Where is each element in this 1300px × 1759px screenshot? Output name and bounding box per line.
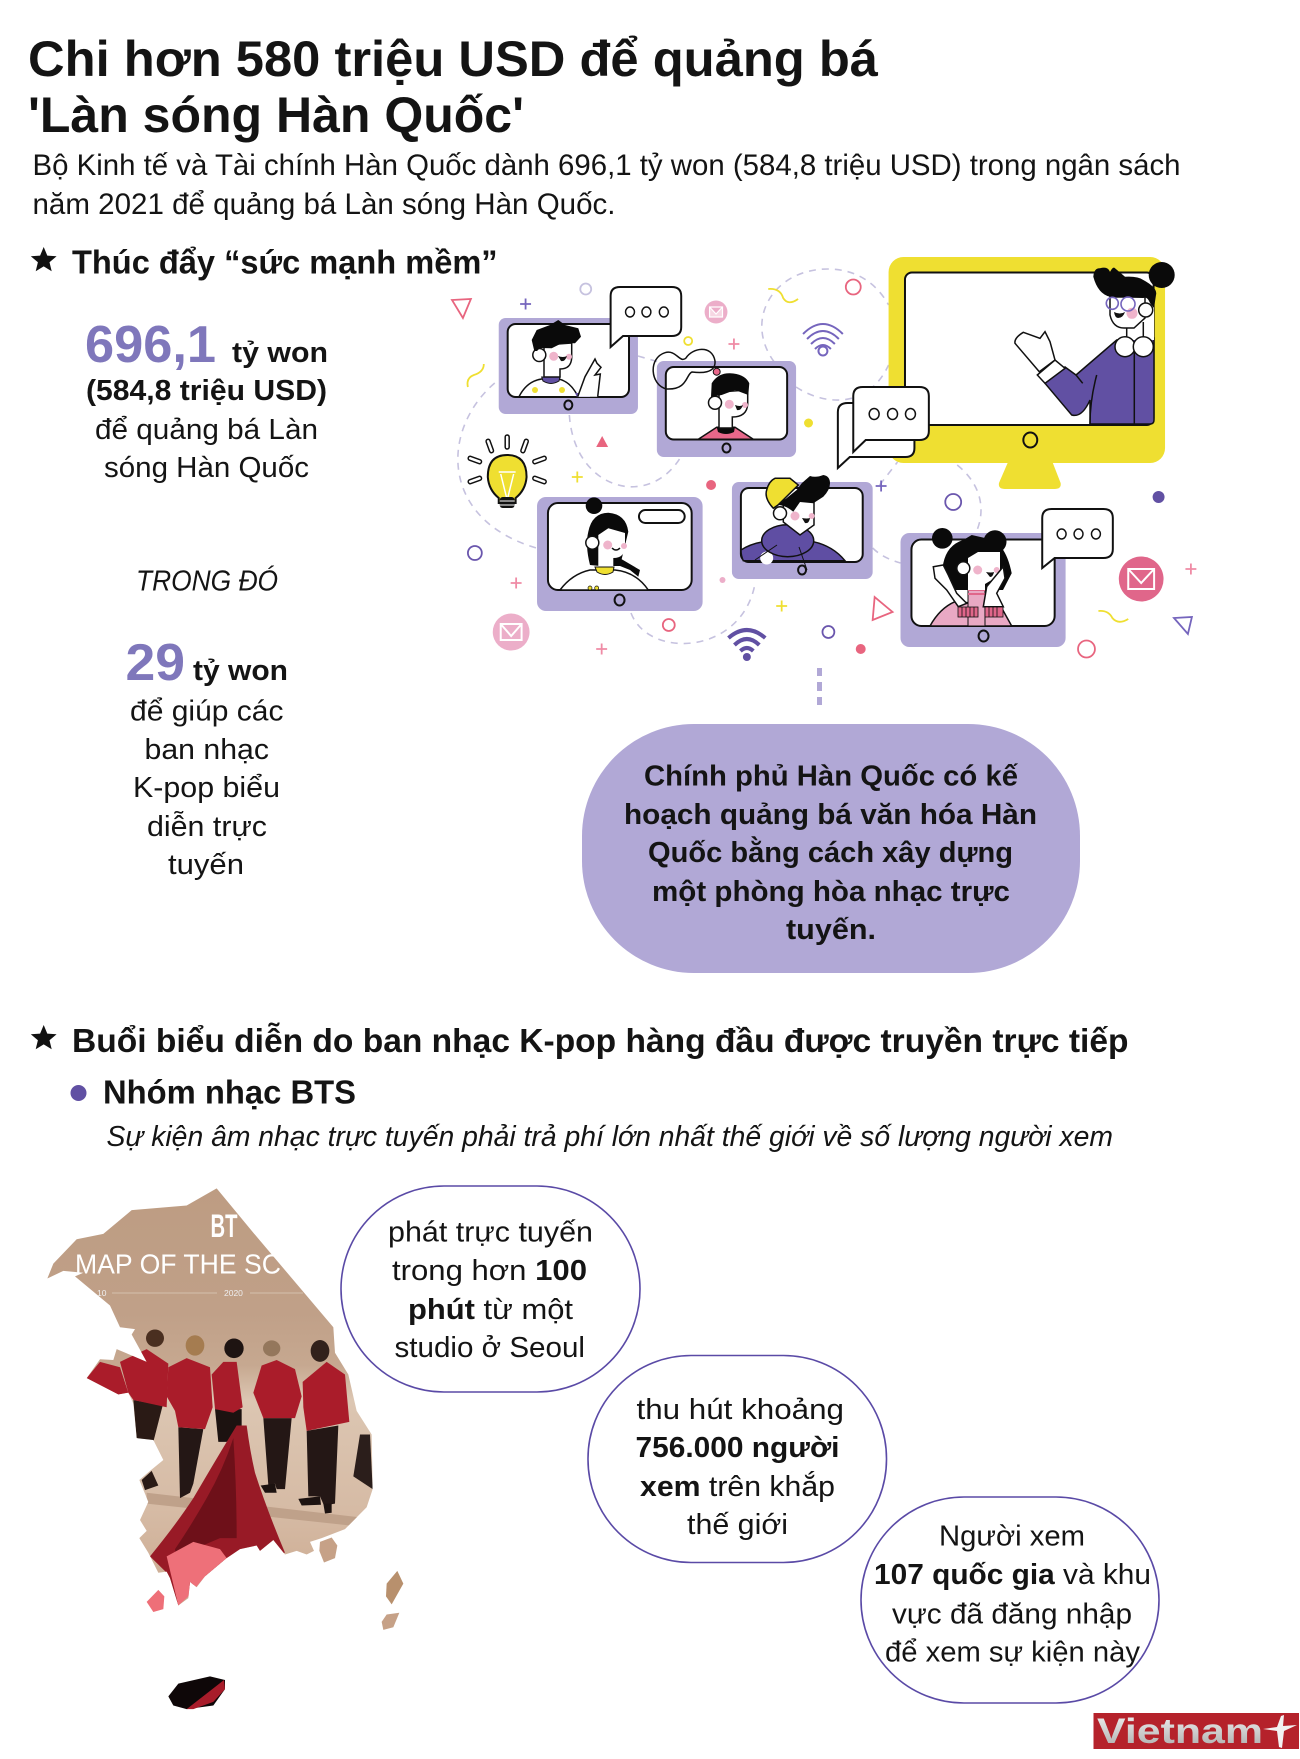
bubble: 100 minutes streaming: trong hơn 100 [392, 1255, 587, 1287]
stat: 29 billion won: tỷ won [193, 655, 288, 687]
stat: 29 billion won: diễn trực [147, 810, 267, 843]
speech bubble: lower-right [1042, 509, 1113, 568]
decorative confetti [452, 280, 1196, 658]
callout: virtual concert hall: tuyến. [786, 914, 876, 946]
bubble: 756,000 viewers [588, 1356, 886, 1562]
stat: 696,1 billion won: 696,1 [85, 316, 216, 374]
album cover text: 2020 [224, 1288, 243, 1298]
stat: 696,1 billion won: để quảng bá Làn [95, 414, 318, 446]
speech bubble: double centre [838, 387, 929, 468]
bubble: 107 countries: để xem sự kiện này [885, 1636, 1140, 1668]
intro text: năm 2021 để quảng bá Làn sóng Hàn Quốc. [32, 188, 616, 221]
callout: virtual concert hall: hoạch quảng bá văn hóa Hàn [624, 799, 1037, 831]
title: Chi hơn 580 triệu USD để quảng bá [28, 31, 878, 87]
stat: 29 billion won: K-pop biểu [133, 772, 280, 804]
monitor: top-left frame [499, 318, 638, 414]
character: top-centre caller [698, 373, 753, 439]
stat: 29 billion won: để giúp các [130, 696, 284, 728]
character: lower-right caller [930, 528, 1012, 626]
person C and gown [150, 1339, 285, 1605]
bubble: 756,000 viewers: xem trên khắp [640, 1470, 835, 1503]
callout: virtual concert hall: Chính phủ Hàn Quốc có kế [644, 760, 1019, 792]
callout: virtual concert hall [582, 724, 1080, 973]
heading: live K-pop concert: Buổi biểu diễn do ban nhạc K-pop hàng đầu được truyền trực tiếp [72, 1022, 1128, 1059]
dashed connector arcs [458, 269, 981, 644]
stat: 29 billion won: ban nhạc [144, 734, 269, 766]
bubble: 100 minutes streaming: studio ở Seoul [394, 1332, 585, 1364]
stat: 696,1 billion won: tỷ won [232, 337, 328, 369]
album cover text: 10 [97, 1288, 107, 1298]
Jeju island [168, 1676, 225, 1709]
monitor: lower-right frame [901, 533, 1066, 647]
logo: Vietnam+ [1094, 1712, 1299, 1751]
album cover text [75, 1208, 303, 1298]
bubble: 107 countries [861, 1497, 1159, 1703]
character: presenter in yellow monitor [1015, 262, 1175, 424]
heading: soft power: Thúc đẩy “sức mạnh mềm” [72, 244, 498, 280]
logo: Vietnam+: Vietnam [1097, 1712, 1263, 1751]
character: top-left caller [519, 320, 601, 397]
callout: virtual concert hall: một phòng hòa nhạc trực [652, 876, 1010, 908]
icon: envelope red [1119, 556, 1164, 602]
intro text [32, 149, 1180, 221]
stat: 29 billion won: tuyến [168, 849, 244, 881]
bubble: 107 countries: 107 quốc gia và khu [874, 1559, 1151, 1591]
monitor: yellow presenter screen [889, 257, 1165, 489]
album cover text: BT [210, 1208, 238, 1244]
person B [167, 1335, 213, 1498]
screens, bubbles and confetti [452, 257, 1196, 661]
icon: envelope small pink [705, 300, 727, 324]
icon: envelope pink [493, 614, 530, 650]
icon: light bulb [468, 435, 547, 508]
intro text: Bộ Kinh tế và Tài chính Hàn Quốc dành 696,1 tỷ won (584,8 triệu USD) trong ngân sách [32, 149, 1180, 182]
thought bubble dot [713, 368, 720, 375]
bubble: 756,000 viewers: thu hút khoảng [636, 1394, 844, 1426]
person D [253, 1340, 302, 1493]
sub-heading: BTS: Nhóm nhạc BTS [103, 1074, 356, 1110]
speech bubble: top-left [611, 287, 681, 347]
bubble: 100 minutes streaming: phát trực tuyến [388, 1216, 593, 1248]
label: of which: TRONG ĐÓ [136, 565, 278, 598]
character: centre caller with hat [741, 475, 845, 570]
monitor: top-centre frame [657, 361, 796, 457]
character: lower-left caller [560, 497, 648, 590]
stat: 696,1 billion won: (584,8 triệu USD) [86, 375, 327, 407]
person A [87, 1329, 168, 1490]
dashed connector to callout [817, 668, 822, 705]
monitor: lower-left frame [537, 497, 703, 611]
title [28, 31, 878, 143]
bubble: 756,000 viewers: 756.000 người [636, 1432, 840, 1464]
stat: 29 billion won: 29 [126, 634, 185, 692]
icon: wifi outline [803, 324, 843, 356]
illustration: online video call [452, 257, 1196, 661]
icon: wifi solid [728, 630, 765, 661]
thought bubble [653, 349, 715, 389]
bubble: 100 minutes streaming: phút từ một [408, 1294, 573, 1326]
monitor: centre frame [732, 482, 873, 579]
bubble: 100 minutes streaming [341, 1186, 640, 1392]
italic description: Sự kiện âm nhạc trực tuyến phải trả phí lớn nhất thế giới về số lượng người xem [106, 1121, 1113, 1153]
bubble: 756,000 viewers: thế giới [687, 1509, 788, 1541]
bubble: 107 countries: Người xem [939, 1520, 1085, 1552]
map of Korea with BTS photo [40, 1182, 403, 1709]
stat: 696,1 billion won: sóng Hàn Quốc [104, 452, 309, 484]
bubble: 107 countries: vực đã đăng nhập [892, 1598, 1132, 1630]
album cover text: MAP OF THE SC [75, 1248, 281, 1280]
person E [298, 1340, 349, 1513]
title: 'Làn sóng Hàn Quốc' [28, 87, 524, 143]
small islands [147, 1537, 403, 1630]
stat: 29 billion won [126, 634, 288, 881]
person far right [353, 1435, 373, 1489]
callout: virtual concert hall: Quốc bằng cách xây dựng [648, 835, 1013, 869]
stat: 696,1 billion won [85, 316, 328, 484]
